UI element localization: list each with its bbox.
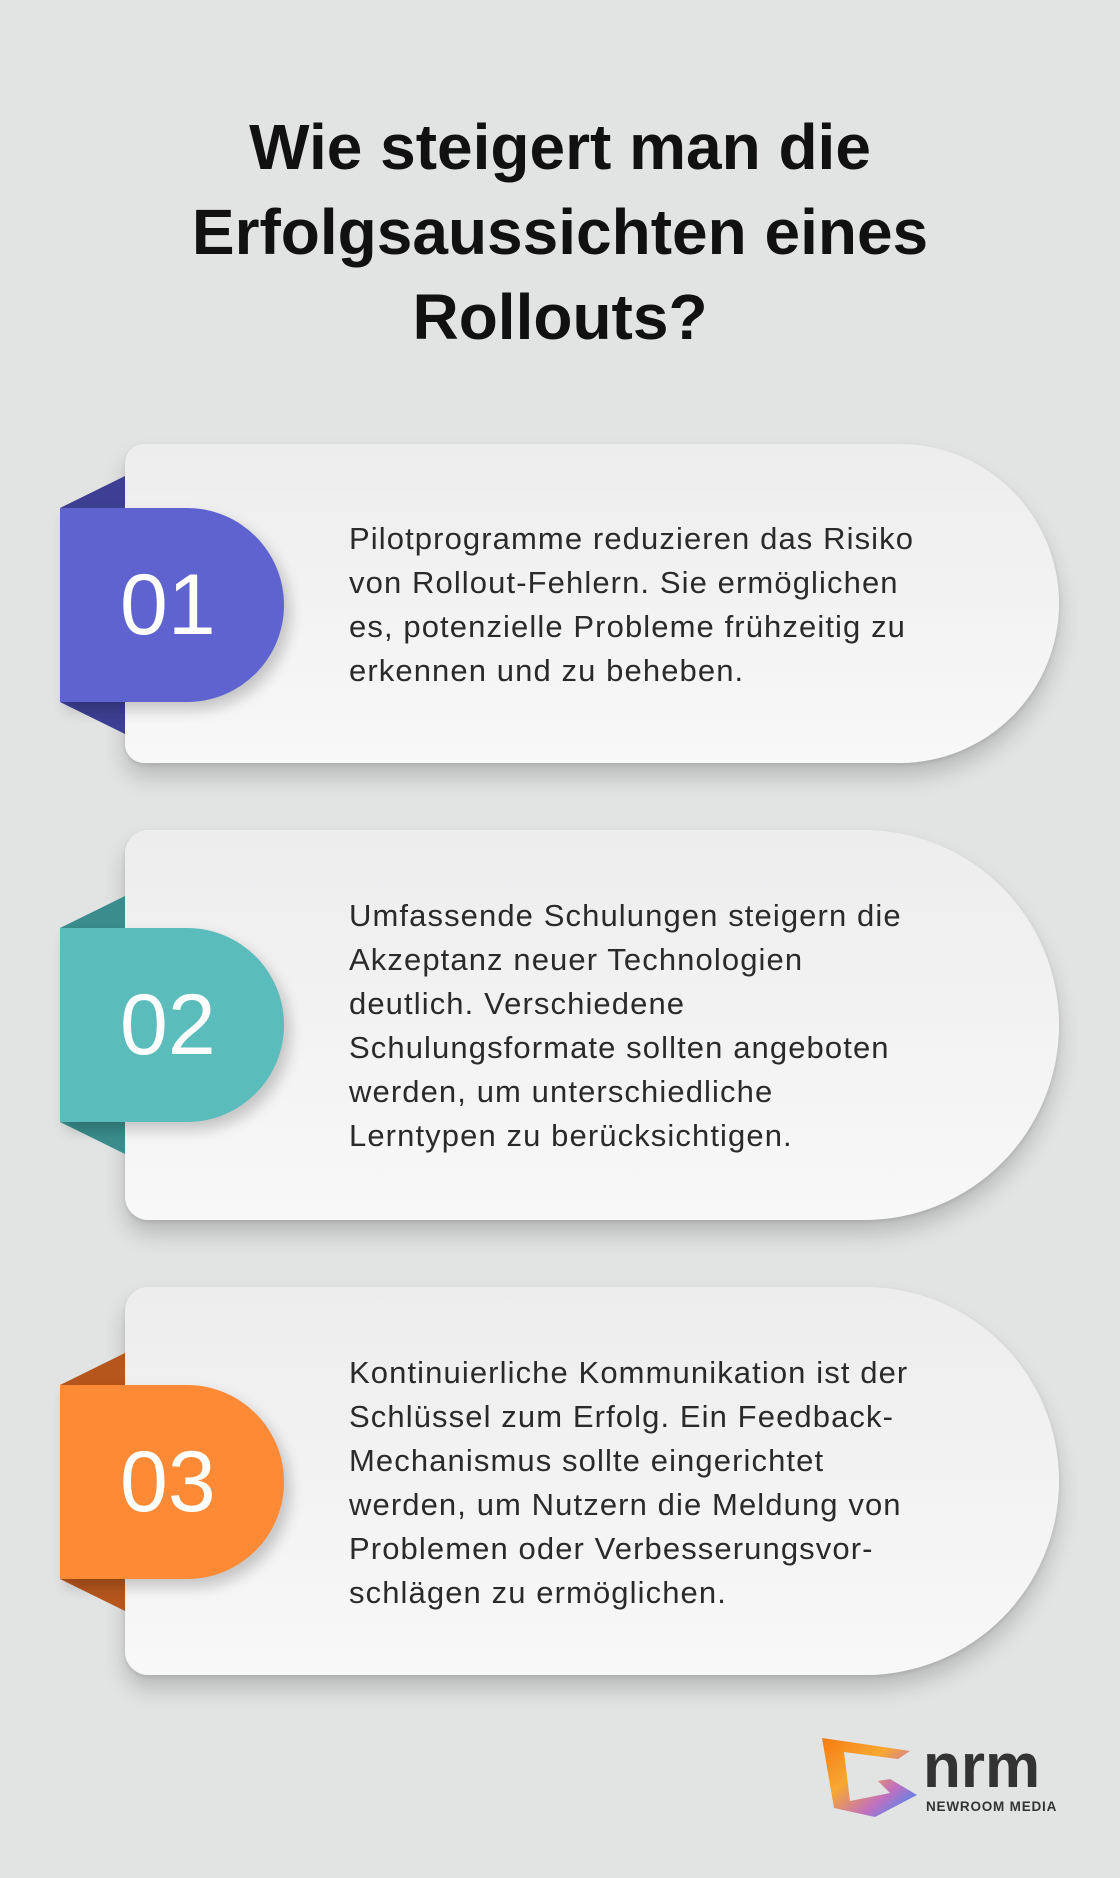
text 3: Problemen oder Verbesserungsvor-: [349, 1531, 874, 1566]
text 3: schlägen zu ermöglichen.: [349, 1575, 727, 1610]
text 2: deutlich. Verschiedene: [349, 986, 685, 1021]
text 3: Kontinuierliche Kommunikation ist der: [349, 1355, 908, 1390]
badge 03: [60, 1385, 284, 1579]
badge 01: [60, 508, 284, 702]
logo: NEWROOM MEDIA: [926, 1799, 1057, 1814]
text 2: [349, 898, 902, 1153]
text 2: werden, um unterschiedliche: [349, 1074, 773, 1109]
text 2: Lerntypen zu berücksichtigen.: [349, 1118, 793, 1153]
title: [192, 111, 928, 353]
title: Erfolgsaussichten eines: [192, 196, 928, 268]
logo: [822, 1732, 1057, 1817]
badge 01: 01: [120, 557, 216, 653]
card 2: [125, 830, 1059, 1220]
panel: step 1: [60, 444, 1067, 786]
title: Rollouts?: [412, 281, 708, 353]
title: Wie steigert man die: [249, 111, 871, 183]
text 2: Akzeptanz neuer Technologien: [349, 942, 803, 977]
text 3: Schlüssel zum Erfolg. Ein Feedback-: [349, 1399, 894, 1434]
logo text: nrm: [923, 1732, 1040, 1801]
badge 02: [60, 928, 284, 1122]
panel: step 2: [60, 830, 1067, 1242]
text 1: Pilotprogramme reduzieren das Risiko: [349, 521, 914, 556]
fold 1: [60, 476, 125, 734]
fold 2: [60, 896, 125, 1154]
card 1: [125, 444, 1059, 763]
text 3: [349, 1355, 908, 1610]
panel: step 3: [60, 1287, 1067, 1698]
text 1: [349, 521, 914, 688]
card 3: [125, 1287, 1059, 1675]
text 2: Schulungsformate sollten angeboten: [349, 1030, 890, 1065]
text 3: Mechanismus sollte eingerichtet: [349, 1443, 824, 1478]
text 1: von Rollout-Fehlern. Sie ermöglichen: [349, 565, 899, 600]
text 3: werden, um Nutzern die Meldung von: [349, 1487, 902, 1522]
icon: logo mark: [822, 1738, 917, 1817]
fold 3: [60, 1353, 125, 1611]
text 2: Umfassende Schulungen steigern die: [349, 898, 902, 933]
badge 02: 02: [120, 977, 216, 1073]
text 1: erkennen und zu beheben.: [349, 653, 744, 688]
badge 03: 03: [120, 1434, 216, 1530]
text 1: es, potenzielle Probleme frühzeitig zu: [349, 609, 906, 644]
